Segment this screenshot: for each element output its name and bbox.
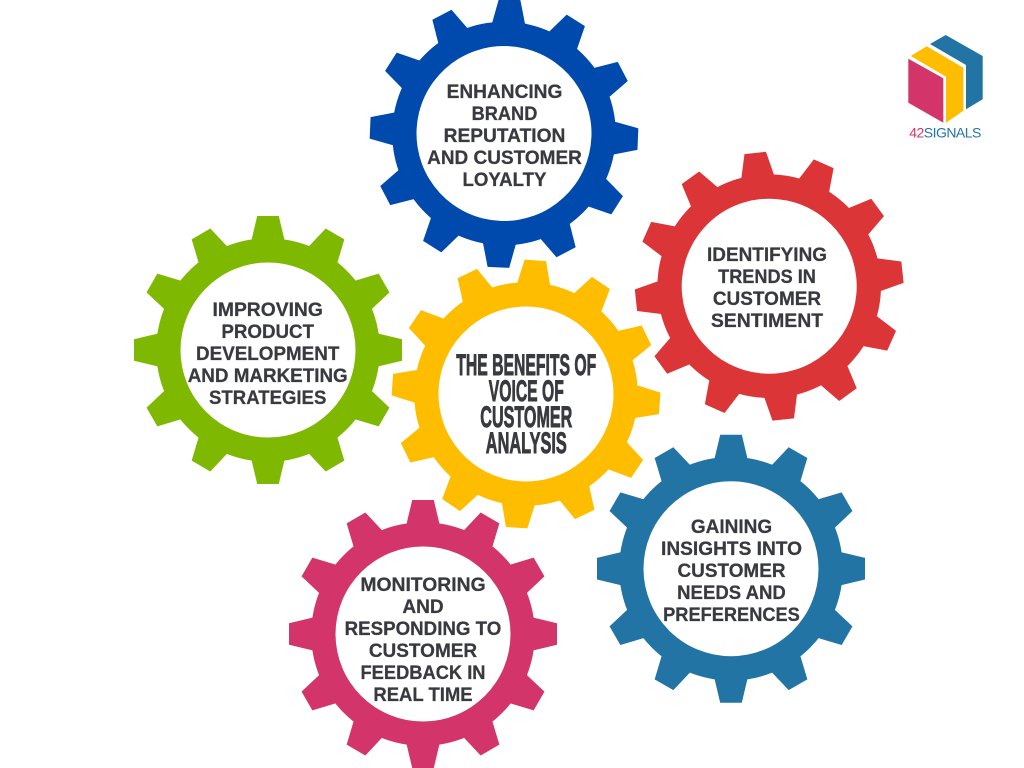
text: gaining insights into customer needs and preferences [661, 517, 802, 626]
icon: yellow gear [383, 251, 669, 537]
text: improving product development and marketing strategies: IMPROVING [213, 300, 323, 321]
text: gaining insights into customer needs and preferences: NEEDS AND [677, 583, 786, 604]
panel: identifying trends gear [622, 139, 916, 433]
text: monitoring and responding to customer feedback in real time: CUSTOMER [369, 641, 477, 662]
text: identifying trends in customer sentiment: IDENTIFYING [707, 245, 827, 266]
text: identifying trends in customer sentiment [707, 245, 827, 332]
text: gaining insights into customer needs and preferences: INSIGHTS INTO [661, 539, 802, 560]
logo wordmark: 42SIGNALS [909, 124, 981, 140]
icon: teal blue gear [597, 435, 865, 703]
text: gaining insights into customer needs and preferences: CUSTOMER [678, 561, 786, 582]
text: enhancing brand reputation and customer loyalty [427, 82, 582, 191]
text: gaining insights into customer needs and preferences: GAINING [691, 517, 772, 538]
text: monitoring and responding to customer feedback in real time: REAL TIME [373, 685, 473, 706]
text: monitoring and responding to customer feedback in real time: FEEDBACK IN [360, 663, 486, 684]
title: CUSTOMER [480, 401, 572, 434]
title: VOICE OF [489, 375, 564, 408]
text: gaining insights into customer needs and preferences: PREFERENCES [663, 605, 800, 626]
text: improving product development and marketing strategies [188, 300, 348, 409]
text: improving product development and marketing strategies: PRODUCT [221, 322, 314, 343]
text: identifying trends in customer sentiment: TRENDS IN [718, 267, 816, 288]
text: improving product development and marketing strategies: AND MARKETING [188, 366, 348, 387]
text: identifying trends in customer sentiment: CUSTOMER [713, 289, 821, 310]
panel: enhancing brand reputation gear [365, 0, 643, 273]
icon: blue gear [365, 0, 643, 273]
text: enhancing brand reputation and customer loyalty: ENHANCING [447, 82, 562, 103]
icon: pink gear [289, 500, 557, 768]
text: identifying trends in customer sentiment: SENTIMENT [711, 311, 823, 332]
icon: green gear [134, 216, 402, 484]
title: THE BENEFITS OF [456, 349, 596, 382]
text: enhancing brand reputation and customer loyalty: REPUTATION [444, 126, 565, 147]
title: ANALYSIS [486, 427, 567, 460]
text: enhancing brand reputation and customer loyalty: BRAND [472, 104, 537, 125]
text: monitoring and responding to customer feedback in real time: MONITORING [360, 575, 486, 596]
logo: 42signals [908, 35, 983, 140]
text: monitoring and responding to customer feedback in real time: RESPONDING TO [345, 619, 501, 640]
panel: improving product development gear [134, 216, 402, 484]
text: improving product development and marketing strategies: STRATEGIES [209, 388, 327, 409]
panel: central title gear [383, 251, 669, 537]
panel: monitoring feedback gear [289, 500, 557, 768]
title [456, 349, 596, 460]
text: improving product development and marketing strategies: DEVELOPMENT [196, 344, 340, 365]
text: enhancing brand reputation and customer loyalty: LOYALTY [462, 170, 547, 191]
icon: logo cube [908, 35, 983, 123]
icon: red gear [622, 139, 916, 433]
text: monitoring and responding to customer feedback in real time: AND [402, 597, 444, 618]
text: monitoring and responding to customer feedback in real time [345, 575, 501, 706]
panel: gaining insights gear [597, 435, 865, 703]
text: enhancing brand reputation and customer loyalty: AND CUSTOMER [427, 148, 582, 169]
